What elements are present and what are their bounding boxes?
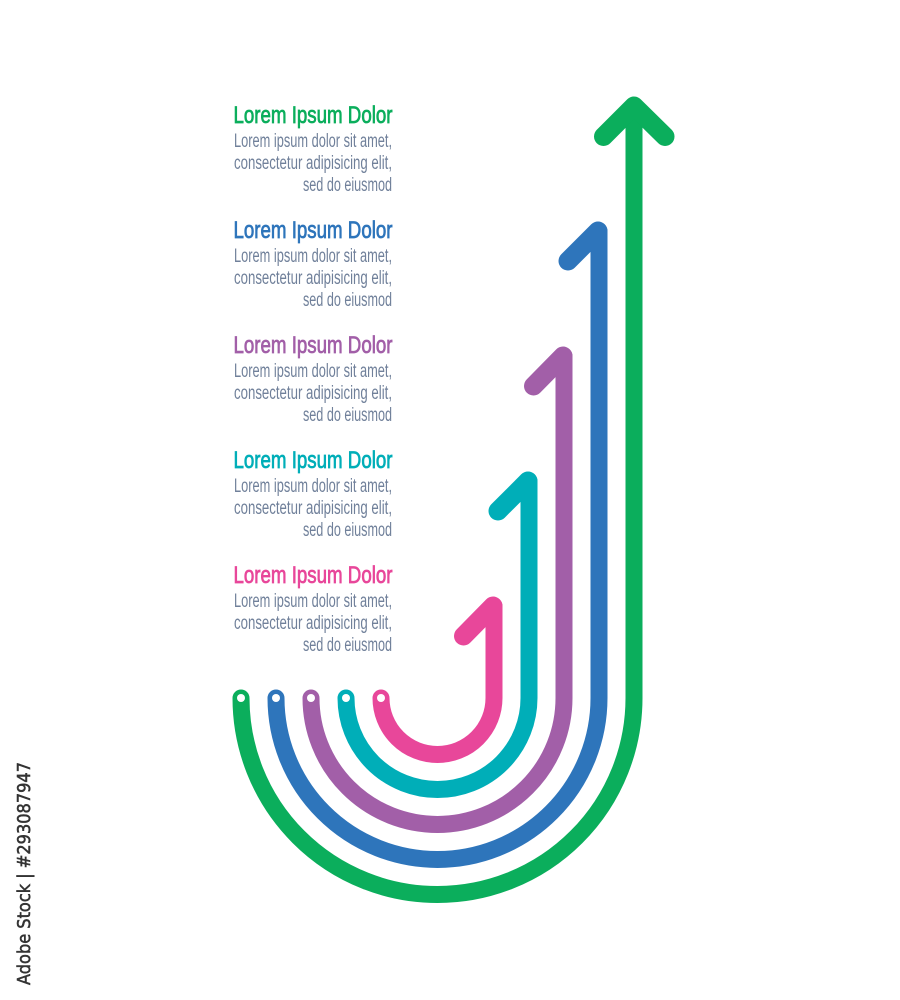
text block: green: sed do eiusmod xyxy=(303,175,392,196)
arrow: purple xyxy=(307,356,564,824)
text block: teal xyxy=(234,447,392,541)
text block: blue: Lorem Ipsum Dolor xyxy=(234,217,392,244)
text block: blue: sed do eiusmod xyxy=(303,290,392,311)
arrow: pink xyxy=(377,606,494,754)
text block: pink xyxy=(234,562,392,656)
text block: purple xyxy=(234,332,392,426)
text block: green: Lorem ipsum dolor sit amet, xyxy=(234,131,392,152)
text block: green xyxy=(234,102,392,196)
text block: teal: sed do eiusmod xyxy=(303,520,392,541)
arrow: blue xyxy=(272,231,599,859)
text block: teal: consectetur adipisicing elit, xyxy=(234,498,392,519)
text block: pink: sed do eiusmod xyxy=(303,635,392,656)
text block: teal: Lorem ipsum dolor sit amet, xyxy=(234,476,392,497)
text block: green: consectetur adipisicing elit, xyxy=(234,153,392,174)
stock id label: Adobe Stock | #293087947 xyxy=(15,762,35,985)
arrow: teal xyxy=(342,481,529,790)
text block: pink: consectetur adipisicing elit, xyxy=(234,613,392,634)
text block: blue xyxy=(234,217,392,311)
text block: green: Lorem Ipsum Dolor xyxy=(234,102,392,129)
arrow: green xyxy=(237,106,665,895)
text block: teal: Lorem Ipsum Dolor xyxy=(234,447,392,474)
text block: purple: Lorem Ipsum Dolor xyxy=(234,332,392,359)
text block: purple: Lorem ipsum dolor sit amet, xyxy=(234,361,392,382)
text block: blue: Lorem ipsum dolor sit amet, xyxy=(234,246,392,267)
text block: pink: Lorem Ipsum Dolor xyxy=(234,562,392,589)
text block: blue: consectetur adipisicing elit, xyxy=(234,268,392,289)
text block: pink: Lorem ipsum dolor sit amet, xyxy=(234,591,392,612)
text block: purple: consectetur adipisicing elit, xyxy=(234,383,392,404)
text block: purple: sed do eiusmod xyxy=(303,405,392,426)
